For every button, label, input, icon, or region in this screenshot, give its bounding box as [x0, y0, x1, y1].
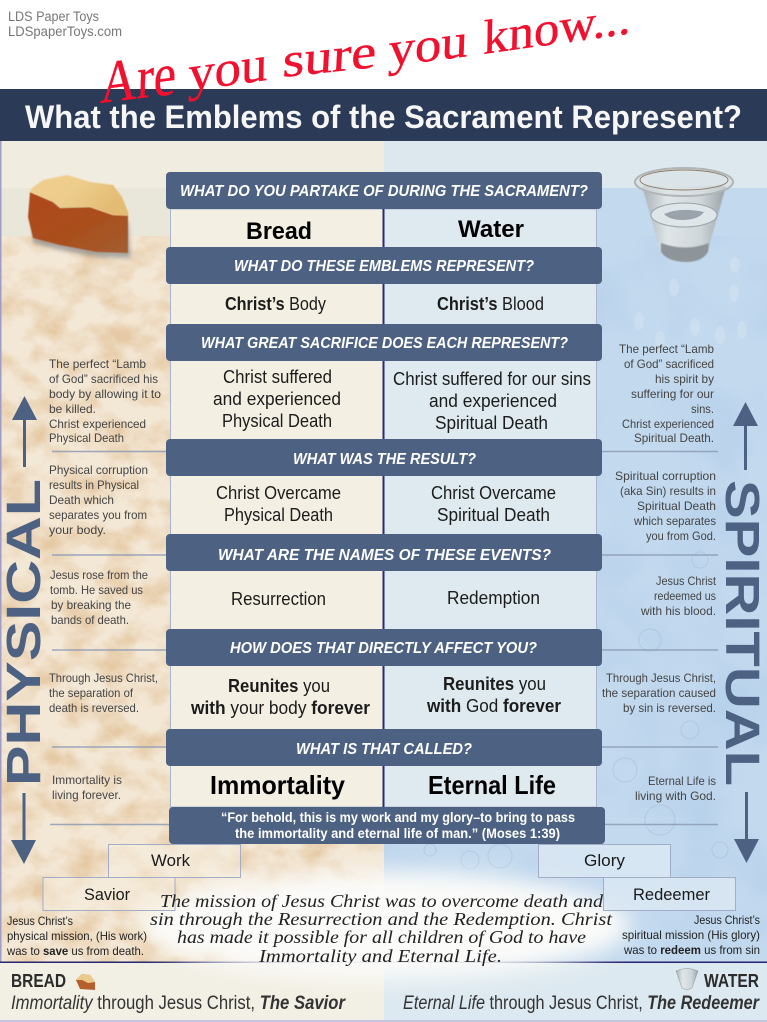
mission statement: The mission of Jesus Christ was to overcome death and	[160, 891, 603, 911]
center table: result: Spiritual Death	[437, 505, 550, 525]
center table: sacrifice	[213, 367, 591, 433]
mission statement: Immortality and Eternal Life.	[258, 946, 502, 966]
right side notes: Jesus Christ	[656, 574, 717, 588]
center table: outcome names: Immortality	[210, 770, 346, 800]
site credit	[8, 9, 122, 39]
right side notes	[602, 342, 717, 803]
center table: outcome names: Eternal Life	[428, 770, 556, 800]
bottom band right	[384, 963, 767, 1020]
left side notes: your body.	[49, 523, 106, 537]
right side notes: his spirit by	[655, 372, 714, 386]
right side notes: by sin is reversed.	[623, 701, 716, 715]
left side notes: Physical Death	[49, 431, 124, 445]
center table: sacrifice: Christ suffered	[223, 367, 332, 387]
boxes: glory and redeemer	[538, 844, 736, 910]
tagline: sure	[281, 25, 378, 88]
white glow	[140, 871, 630, 979]
quote: the immortality and eternal life of man.” (Moses 1:39)	[235, 825, 560, 841]
quote	[221, 809, 575, 841]
left side notes: Through Jesus Christ,	[49, 671, 158, 685]
heading text: WHAT DO THESE EMBLEMS REPRESENT?	[234, 258, 534, 275]
spiritual mission note: spiritual mission (His glory)	[622, 928, 760, 942]
center table: sacrifice: and experienced	[213, 389, 341, 409]
center table: result: Christ Overcame	[216, 483, 341, 503]
center table: sacrifice: and experienced	[429, 391, 557, 411]
left side notes: bands of death.	[51, 613, 129, 627]
center table: body and blood: Christ’s Blood	[437, 294, 544, 314]
tagline: you	[188, 35, 268, 102]
box labels: Redeemer	[633, 885, 710, 904]
bottom left: bread summary	[11, 971, 346, 1014]
bottom right: water summary: WATER	[704, 971, 759, 991]
left side notes: by breaking the	[51, 598, 131, 612]
right side notes: which separates	[633, 514, 716, 528]
arrows: physical	[11, 396, 37, 864]
title: What the Emblems of the Sacrament Represent?	[25, 99, 742, 135]
left side notes: death is reversed.	[49, 701, 139, 715]
left side notes: Immortality is	[52, 773, 122, 787]
center table: sacrifice: Physical Death	[222, 411, 332, 431]
background panel: spiritual side	[384, 141, 767, 963]
center table: events: Redemption	[447, 588, 540, 608]
tagline	[100, 0, 631, 117]
box labels: Work	[151, 851, 190, 870]
center table: result: Christ Overcame	[431, 483, 556, 503]
title bar	[0, 89, 767, 141]
box labels	[84, 851, 710, 904]
left side notes: tomb. He saved us	[50, 583, 143, 597]
physical mission note	[6, 914, 147, 958]
left side notes: Physical corruption	[49, 463, 148, 477]
physical mission note: physical mission, (His work)	[7, 929, 147, 943]
center table: effect: with your body forever	[190, 698, 370, 718]
left side notes: body by allowing it to	[49, 387, 161, 401]
right side notes: Spiritual corruption	[615, 469, 716, 483]
heading bars	[166, 172, 605, 844]
left side notes: Death which	[49, 493, 114, 507]
bottom right: water summary	[403, 968, 760, 1014]
right side notes: redeemed us	[654, 589, 716, 603]
center table: effect: Reunites you	[228, 676, 330, 696]
center table: events: Resurrection	[231, 589, 326, 609]
spiritual mission note: Jesus Christ’s	[694, 913, 760, 927]
quote: “For behold, this is my work and my glory–to bring to pass	[221, 809, 575, 825]
site credit: LDS Paper Toys	[8, 9, 99, 24]
center table: emblem answers	[246, 216, 524, 245]
center table: emblem answers: Water	[458, 216, 524, 243]
spiritual mission note	[622, 913, 760, 957]
bottom band left	[0, 963, 384, 1020]
mission statement: has made it possible for all children of God to have	[177, 927, 586, 947]
left side notes: The perfect “Lamb	[49, 357, 146, 371]
right side notes: Through Jesus Christ,	[606, 671, 716, 685]
left side notes: of God” sacrificed his	[49, 372, 158, 386]
bottom rule	[0, 962, 767, 1022]
site credit: LDSpaperToys.com	[8, 24, 122, 39]
right side notes: the separation caused	[602, 686, 716, 700]
left side notes: separates you from	[49, 508, 147, 522]
left side notes: results in Physical	[49, 478, 139, 492]
left side notes: Jesus rose from the	[50, 568, 148, 582]
bottom left: bread summary: BREAD	[11, 971, 66, 991]
arrows: spiritual	[733, 402, 759, 863]
boxes: work and savior	[43, 844, 240, 910]
right side notes: living with God.	[635, 789, 716, 803]
center table: effect	[190, 674, 561, 718]
spiritual mission note: was to redeem us from sin	[623, 943, 760, 957]
right side notes: The perfect “Lamb	[619, 342, 714, 356]
box labels: Glory	[584, 851, 625, 870]
left side notes: living forever.	[52, 788, 121, 802]
right side notes: suffering for our	[631, 387, 714, 401]
bottom left: bread summary: Immortality through Jesus Christ, The Savior	[11, 993, 346, 1014]
box labels: Savior	[84, 885, 130, 904]
center table: result: Physical Death	[224, 505, 333, 525]
left side notes: Christ experienced	[49, 417, 146, 431]
tagline: you	[388, 14, 469, 77]
heading text: WHAT IS THAT CALLED?	[296, 741, 472, 758]
icon: water cup	[635, 168, 733, 262]
mission statement: sin through the Resurrection and the Redemption. Christ	[150, 909, 613, 929]
physical mission note: Jesus Christ’s	[7, 914, 73, 928]
center table: effect: Reunites you	[443, 674, 546, 694]
left side notes: be killed.	[49, 402, 96, 416]
center table: emblem answers: Bread	[246, 218, 312, 245]
right side notes: with his blood.	[640, 604, 716, 618]
right side notes: of God” sacrificed	[624, 357, 714, 371]
physical mission note: was to save us from death.	[6, 944, 144, 958]
right side notes: Eternal Life is	[648, 774, 716, 788]
right side notes: (aka Sin) results in	[620, 484, 716, 498]
center table: outcome names	[210, 770, 556, 800]
left side notes: the separation of	[49, 686, 134, 700]
heading text: WHAT GREAT SACRIFICE DOES EACH REPRESENT?	[201, 335, 568, 352]
heading text: WHAT DO YOU PARTAKE OF DURING THE SACRAMENT?	[180, 183, 588, 200]
center column background	[170, 209, 596, 807]
vertical label: spiritual: SPIRITUAL	[715, 480, 767, 786]
heading text: HOW DOES THAT DIRECTLY AFFECT YOU?	[230, 640, 537, 657]
bottom right: water summary: Eternal Life through Jesus Christ, The Redeemer	[403, 993, 760, 1014]
center table: events	[231, 588, 540, 609]
right side notes: Spiritual Death	[637, 499, 716, 513]
left side notes	[49, 357, 161, 802]
heading text	[180, 183, 588, 758]
heading text: WHAT WAS THE RESULT?	[293, 451, 476, 468]
right side notes: you from God.	[646, 529, 716, 543]
center table: sacrifice: Spiritual Death	[435, 413, 548, 433]
icon: bread	[28, 175, 131, 258]
right side notes: sins.	[691, 402, 714, 416]
center table: sacrifice: Christ suffered for our sins	[393, 369, 591, 389]
background panel: physical side	[0, 141, 384, 1022]
center table: body and blood	[225, 294, 544, 314]
tagline: Are	[100, 40, 177, 117]
heading text: WHAT ARE THE NAMES OF THESE EVENTS?	[218, 547, 551, 564]
center table: body and blood: Christ’s Body	[225, 294, 326, 314]
mission statement	[150, 891, 613, 966]
center table: effect: with God forever	[426, 696, 561, 716]
right side notes: Spiritual Death.	[634, 431, 714, 445]
center table: result	[216, 483, 556, 525]
right side notes: Christ experienced	[622, 417, 714, 431]
divider lines	[50, 452, 718, 824]
